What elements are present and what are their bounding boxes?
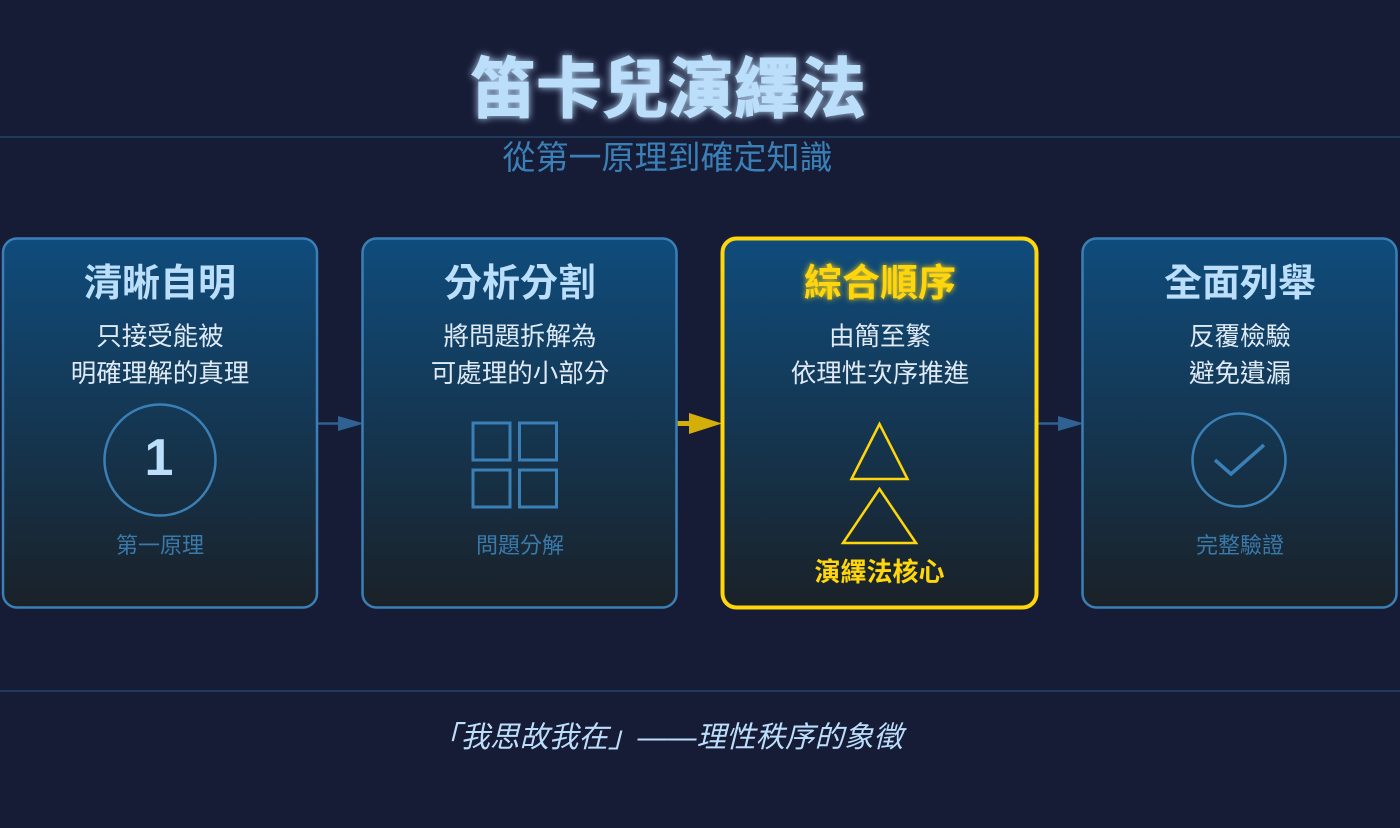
caption: 第一原理 [116,533,204,558]
icon: numbered circle: 1 [145,429,173,487]
heading: 全面列舉: 全面列舉 [1164,263,1316,305]
caption: 問題分解 [476,533,564,558]
text: description: 明確理解的真理 [71,360,249,388]
panel: 清晰自明 [3,238,317,608]
text: description [791,323,969,388]
caption: 演繹法核心 [814,557,945,587]
arrow: step 3 to 4 [1037,416,1084,431]
text: description: 只接受能被 [96,323,224,351]
subtitle: 從第一原理到確定知識 [502,139,832,176]
panel: 全面列舉 [1082,238,1396,608]
text: description [431,323,609,388]
arrow: step 1 to 2 [318,416,364,431]
text: description: 反覆檢驗 [1189,323,1291,351]
icon: check circle [1192,414,1286,506]
text: description: 避免遺漏 [1189,360,1291,388]
title: 笛卡兒演繹法 [470,52,866,126]
caption: 完整驗證 [1196,533,1284,558]
panel: 綜合順序 (highlighted) [722,238,1036,608]
text: description [71,323,249,388]
quote: 「我思故我在」——理性秩序的象徵 [431,721,907,754]
icon: two triangles [843,424,916,543]
heading: 綜合順序: 綜合順序 [804,263,956,305]
heading: 清晰自明: 清晰自明 [84,263,236,305]
text: description: 依理性次序推進 [791,360,969,388]
heading: 分析分割: 分析分割 [444,263,596,305]
arrow: step 2 to 3 [677,413,722,434]
icon: numbered circle [104,404,216,516]
text: description: 將問題拆解為 [443,323,597,351]
panel: 分析分割 [362,238,676,608]
icon: four squares [473,423,556,507]
text: description [1189,323,1291,388]
text: description: 由簡至繁 [829,323,931,351]
text: description: 可處理的小部分 [431,360,609,388]
